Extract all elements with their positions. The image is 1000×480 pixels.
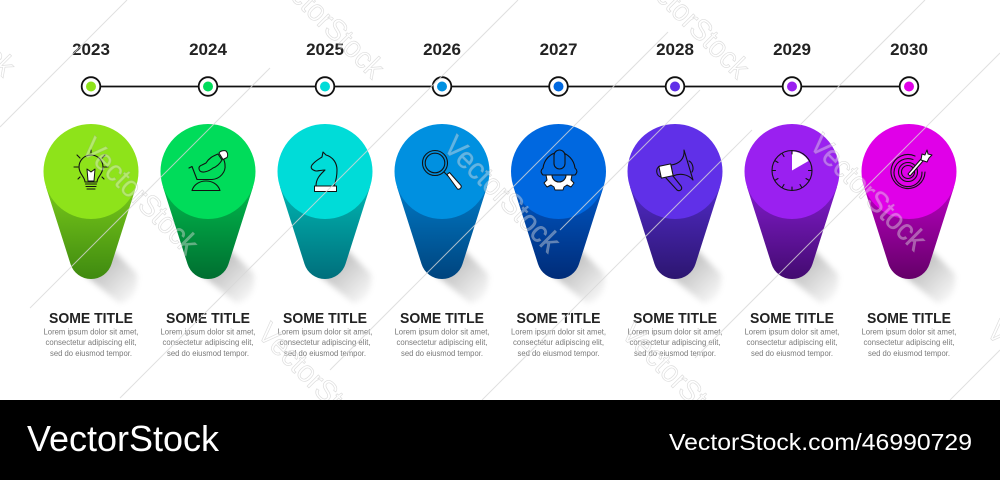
description: sed do eiusmod tempor.: [634, 349, 716, 358]
description: Lorem ipsum dolor sit amet,: [862, 328, 956, 336]
footer url: VectorStock.com/46990729: [669, 429, 972, 455]
timeline marker 2025: [316, 77, 334, 96]
cone: [280, 187, 370, 279]
circle top: [278, 124, 372, 219]
title: SOME TITLE: [867, 310, 951, 327]
description: sed do eiusmod tempor.: [167, 349, 249, 358]
cone: [864, 187, 954, 279]
drop shadow: [786, 250, 838, 303]
icon: microscope: [189, 151, 228, 190]
timeline marker 2024: [199, 77, 217, 96]
timeline marker 2030: [900, 77, 918, 96]
footer brand: VectorStock: [27, 418, 220, 459]
cone: [397, 187, 487, 279]
column 2029: [744, 40, 840, 358]
cone: [514, 187, 604, 279]
year 2029: 2029: [773, 40, 811, 59]
title: SOME TITLE: [283, 310, 367, 327]
description: [278, 328, 372, 358]
icon: target with arrow: [891, 150, 932, 188]
timeline marker 2028: [666, 77, 684, 96]
drop shadow: [436, 250, 488, 303]
description: Lorem ipsum dolor sit amet,: [278, 328, 372, 336]
description: consectetur adipiscing elit,: [280, 338, 370, 347]
icon: helmet and gear: [541, 150, 577, 190]
description: [511, 328, 606, 358]
cone: [46, 187, 136, 279]
description: sed do eiusmod tempor.: [868, 349, 950, 358]
circle top: [160, 124, 256, 219]
description: sed do eiusmod tempor.: [401, 349, 483, 358]
column 2024: [160, 40, 256, 358]
description: sed do eiusmod tempor.: [284, 349, 366, 358]
column 2026: [394, 40, 490, 358]
year 2028: 2028: [656, 40, 694, 59]
description: sed do eiusmod tempor.: [751, 349, 833, 358]
cone: [163, 187, 253, 279]
drop shadow: [552, 250, 605, 303]
year 2024: 2024: [189, 40, 227, 59]
description: Lorem ipsum dolor sit amet,: [744, 328, 840, 336]
watermark overlay: VectorStock: [803, 128, 933, 258]
column 2025: [278, 40, 372, 358]
drop shadow: [319, 250, 371, 303]
circle top: [744, 124, 840, 219]
drop shadow: [202, 250, 254, 303]
icon: magnifying glass: [422, 150, 461, 189]
description: Lorem ipsum dolor sit amet,: [511, 328, 606, 336]
circle top: [628, 124, 722, 219]
title: SOME TITLE: [166, 310, 250, 327]
column 2023: [44, 40, 138, 358]
description: sed do eiusmod tempor.: [50, 349, 132, 358]
watermark overlay: VectorStock: [75, 132, 205, 262]
description: [628, 328, 722, 358]
cone: [747, 187, 837, 279]
drop shadow: [669, 250, 721, 303]
timeline marker 2029: [783, 77, 801, 96]
watermark overlay: VectorStock: [251, 317, 381, 447]
year 2023: 2023: [72, 40, 110, 59]
description: Lorem ipsum dolor sit amet,: [628, 328, 722, 336]
description: consectetur adipiscing elit,: [396, 338, 488, 347]
year 2025: 2025: [306, 40, 344, 59]
description: consectetur adipiscing elit,: [513, 338, 604, 347]
column 2028: [628, 40, 722, 358]
description: consectetur adipiscing elit,: [864, 338, 954, 347]
title: SOME TITLE: [516, 310, 600, 327]
description: sed do eiusmod tempor.: [518, 349, 600, 358]
description: Lorem ipsum dolor sit amet,: [44, 328, 138, 336]
description: Lorem ipsum dolor sit amet,: [160, 328, 256, 336]
title: SOME TITLE: [49, 310, 133, 327]
timeline line: [91, 86, 909, 88]
year 2026: 2026: [423, 40, 461, 59]
description: consectetur adipiscing elit,: [162, 338, 254, 347]
timeline marker 2023: [82, 77, 100, 96]
title: SOME TITLE: [750, 310, 834, 327]
watermark overlay: VectorStock: [437, 130, 567, 260]
description: consectetur adipiscing elit,: [46, 338, 136, 347]
column 2030: [862, 40, 956, 358]
title: SOME TITLE: [633, 310, 717, 327]
description: [394, 328, 490, 358]
description: Lorem ipsum dolor sit amet,: [394, 328, 490, 336]
footer bar: [0, 400, 1000, 480]
description: [744, 328, 840, 358]
circle top: [862, 124, 956, 219]
description: [862, 328, 956, 358]
drop shadow: [903, 250, 955, 303]
icon: light bulb: [74, 150, 108, 189]
description: consectetur adipiscing elit,: [630, 338, 720, 347]
description: [44, 328, 138, 358]
watermark overlay: VectorStock: [615, 317, 745, 447]
cone: [630, 187, 720, 279]
icon: megaphone: [657, 150, 693, 191]
description: consectetur adipiscing elit,: [746, 338, 838, 347]
year 2027: 2027: [540, 40, 577, 59]
circle top: [394, 124, 490, 219]
icon: chess knight: [311, 152, 337, 192]
timeline marker 2027: [549, 77, 568, 96]
icon: clock timer: [772, 150, 812, 190]
description: [160, 328, 256, 358]
year 2030: 2030: [890, 40, 928, 59]
column 2027: [511, 40, 606, 358]
circle top: [44, 124, 138, 219]
timeline marker 2026: [433, 77, 451, 96]
drop shadow: [85, 250, 137, 303]
circle top: [511, 124, 606, 219]
title: SOME TITLE: [400, 310, 484, 327]
